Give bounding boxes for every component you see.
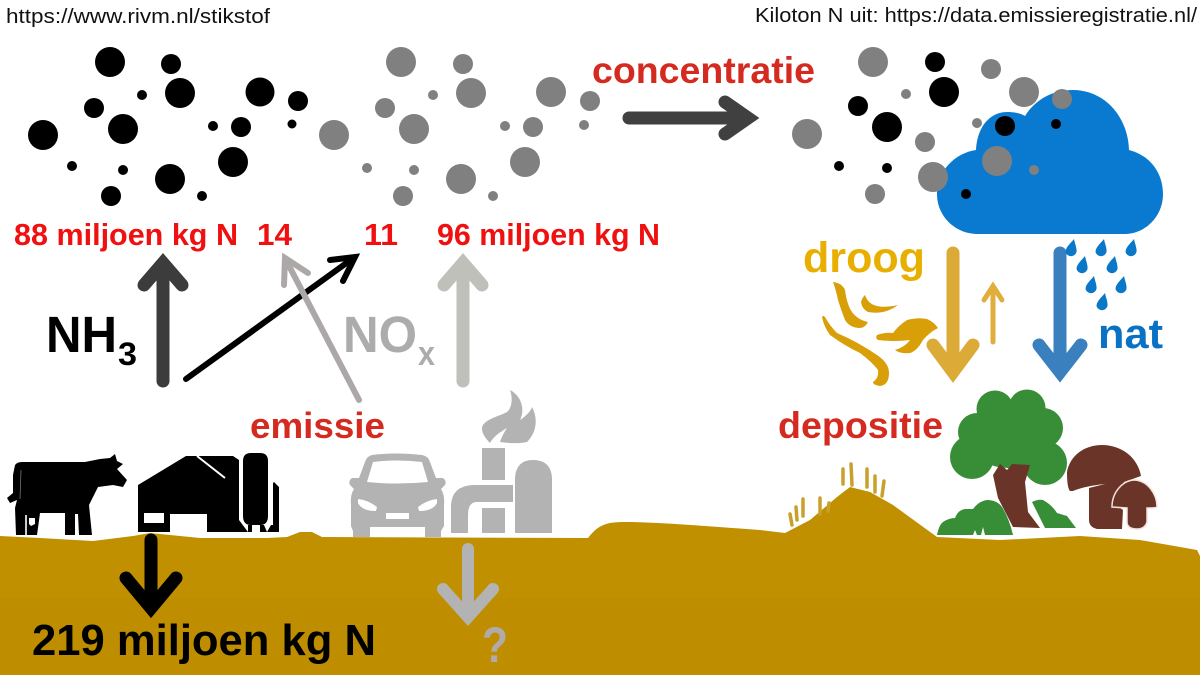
value: NOx concentration: 96 miljoen kg N — [437, 217, 660, 252]
grey down arrow with question mark — [443, 549, 508, 673]
NH3 particle cloud — [28, 47, 308, 206]
value: NH3 concentration: 88 miljoen kg N — [14, 217, 238, 252]
nat down arrow — [1039, 253, 1081, 372]
NH3 up arrow — [144, 263, 182, 381]
icon: car — [349, 454, 446, 537]
soil — [0, 487, 1200, 675]
icon: tree and shrubs — [937, 390, 1076, 535]
NH3 label: 3 — [118, 336, 137, 372]
depositie label: depositie — [778, 405, 943, 446]
small up arrow — [984, 286, 1002, 342]
icon: barn with silo — [138, 453, 279, 532]
NOx label: x — [418, 335, 435, 373]
droog down arrow — [933, 253, 973, 372]
icon: rain drops — [1066, 239, 1137, 310]
icon: factory with flame — [451, 390, 552, 533]
grey diagonal arrow to 14 — [284, 258, 359, 400]
concentratie arrow — [629, 102, 748, 134]
icon: wind and leaf — [822, 282, 938, 386]
emissie label: emissie — [250, 405, 385, 446]
value: 14: 14 — [257, 217, 293, 252]
leaching value: 219 miljoen kg N — [32, 616, 376, 665]
NH3 label: NH — [46, 306, 117, 363]
source link left: https://www.rivm.nl/stikstof — [6, 6, 270, 28]
rain cloud — [937, 90, 1163, 234]
black diagonal arrow to 11 — [186, 257, 355, 379]
NOx particle cloud — [319, 47, 600, 206]
black down arrow to groundwater — [126, 540, 176, 608]
concentratie label: concentratie — [592, 50, 815, 91]
mixed particles over cloud — [792, 47, 1072, 204]
grass on hill — [790, 464, 884, 525]
value: 11: 11 — [364, 217, 398, 252]
droog label: droog — [803, 234, 925, 282]
icon: cow — [7, 454, 127, 535]
source link right: Kiloton N uit: https://data.emissieregistratie.nl/ — [755, 5, 1197, 27]
icon: mushrooms — [1067, 445, 1157, 529]
nat label: nat — [1098, 310, 1163, 357]
NOx up arrow — [444, 263, 482, 381]
NH3 label — [46, 306, 137, 372]
grey down arrow with question mark: ? — [482, 617, 508, 673]
NOx label: NO — [343, 306, 417, 363]
